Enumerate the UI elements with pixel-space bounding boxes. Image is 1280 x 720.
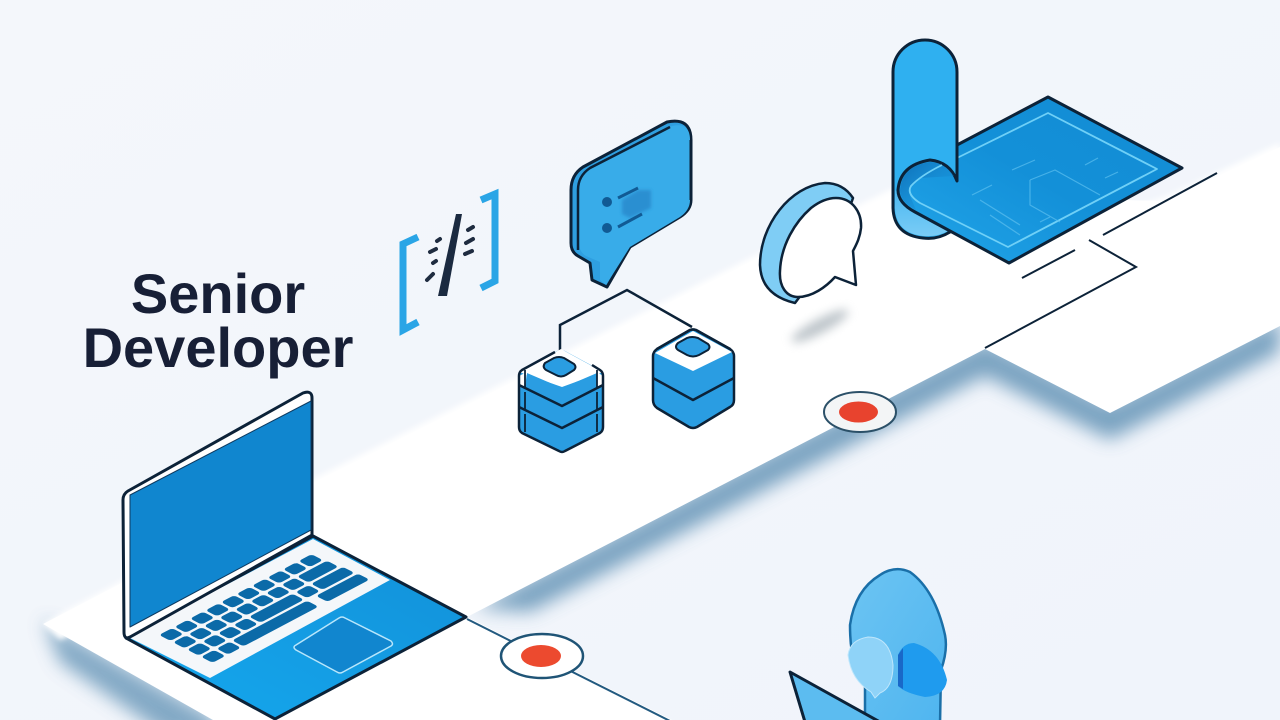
speech bubble shadow [788,305,852,347]
platform shadows [43,318,1280,720]
icon: round speech bubble [760,183,861,303]
laptop keys [159,552,370,663]
blue chat bubble [898,643,947,697]
soft upper platform edge [43,143,1280,640]
icon: chat bubble with list [571,121,691,287]
connector lines on platform [467,173,1217,720]
foreground laptop screen [790,672,880,720]
icon: laptop [123,392,466,719]
icon: code brackets [403,194,495,330]
person silhouette [850,569,946,720]
laptop screen [123,392,312,638]
title [83,262,353,379]
title: Senior [131,262,305,325]
white isometric platform [43,147,1280,720]
icon: rolled blueprint [893,40,1182,263]
laptop keyboard deck [128,539,390,678]
icon: server stack, three tiers [519,349,603,452]
person with chat bubbles [848,569,947,720]
icon: server stack, two tiers [653,330,734,428]
network connector [560,290,692,355]
red marker upper [824,392,896,432]
red marker lower [501,634,583,678]
title: Developer [83,316,353,379]
laptop trackpad [294,617,392,673]
laptop base [126,536,466,719]
light chat bubble [848,637,893,698]
